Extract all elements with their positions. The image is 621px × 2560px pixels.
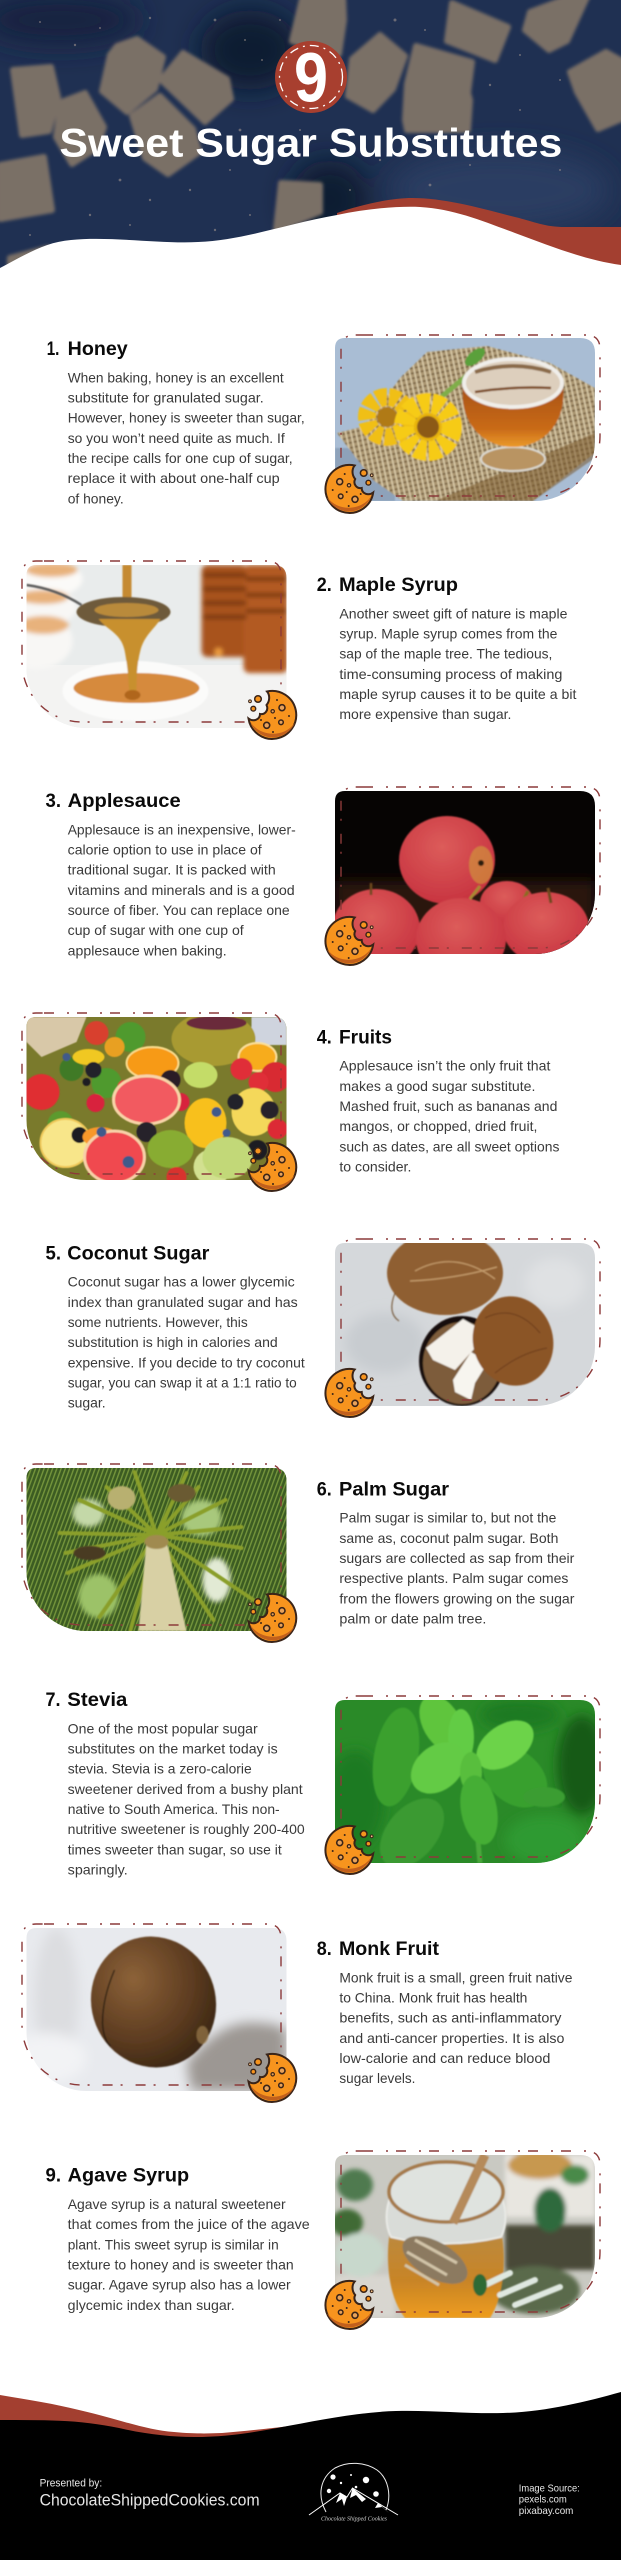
text: honey: of honey.: [68, 490, 124, 506]
panel: 9 agave syrup: [46, 2151, 600, 2329]
icon: cookie: [325, 2281, 373, 2329]
text: honey: so you won’t need quite as much. If: [68, 430, 285, 446]
text: fruits: to consider.: [339, 1158, 411, 1174]
text: coconut sugar: expensive. If you decide to try coconut: [68, 1354, 305, 1370]
text: coconut sugar: [68, 1274, 305, 1411]
text: agave syrup: sugar. Agave syrup also has a lower: [68, 2277, 291, 2293]
footer: image sources: pexels.com: [519, 2494, 567, 2506]
text: applesauce: calorie option to use in place of: [68, 842, 262, 858]
heading: stevia: Stevia: [67, 1689, 127, 1711]
text: agave syrup: glycemic index than sugar.: [68, 2297, 235, 2313]
text: honey: replace it with about one-half cup: [68, 470, 280, 486]
panel: 3 applesauce: [46, 787, 600, 980]
text: stevia: One of the most popular sugar: [68, 1720, 258, 1736]
text: monk fruit: sugar levels.: [339, 2070, 415, 2086]
dashed border: [341, 787, 600, 948]
panel: 6 palm sugar: [22, 1464, 575, 1642]
text: palm sugar: respective plants. Palm sugar comes: [339, 1570, 568, 1586]
heading: monk fruit: Monk Fruit: [339, 1938, 440, 1960]
text: maple syrup: maple syrup causes it to be quite a bit: [339, 686, 576, 702]
text: monk fruit: [339, 1969, 573, 2086]
heading: applesauce: Applesauce: [68, 790, 181, 812]
icon: cookie: [248, 1594, 296, 1642]
panel: 7 stevia: [46, 1688, 607, 1880]
text: palm sugar: same as, coconut palm sugar. Both: [339, 1530, 558, 1546]
dashed border: [341, 2151, 600, 2312]
heading: palm sugar: 6.: [317, 1478, 332, 1500]
heading: maple syrup: 2.: [317, 574, 332, 596]
text: stevia: sweetener derived from a bushy plant: [68, 1781, 303, 1797]
text: maple syrup: Another sweet gift of nature is maple: [339, 605, 568, 621]
text: honey: [68, 369, 305, 506]
text: palm sugar: Palm sugar is similar to, but not the: [339, 1510, 557, 1526]
text: applesauce: traditional sugar. It is packed with: [68, 862, 276, 878]
photo: maple syrup spoon: [26, 565, 286, 728]
header: sugar cubes photo banner: [0, 0, 621, 275]
photo: honey cup and flowers: [335, 338, 595, 501]
text: monk fruit: low-calorie and can reduce blood: [339, 2050, 550, 2066]
text: agave syrup: Agave syrup is a natural sweetener: [68, 2196, 286, 2212]
title: Sweet Sugar Substitutes: [59, 122, 562, 166]
photo: honey jar with dipper: [331, 2151, 595, 2318]
heading: maple syrup: Maple Syrup: [339, 574, 458, 596]
text: palm sugar: palm or date palm tree.: [339, 1610, 486, 1626]
text: stevia: nutritive sweetener is roughly 200-400: [68, 1821, 305, 1837]
dashed border: [22, 561, 281, 722]
text: agave syrup: that comes from the juice of the agave: [68, 2216, 310, 2232]
header wave: white divider: [0, 207, 621, 290]
footer: logo: Chocolate Shipped Cookies: [321, 2517, 388, 2523]
text: maple syrup: more expensive than sugar.: [339, 706, 511, 722]
icon: cookie: [248, 2054, 296, 2102]
text: maple syrup: syrup. Maple syrup comes from the: [339, 626, 558, 642]
text: fruits: mangos, or chopped, dried fruit,: [339, 1118, 537, 1134]
text: maple syrup: sap of the maple tree. The tedious,: [339, 646, 552, 662]
text: honey: substitute for granulated sugar.: [68, 390, 264, 406]
badge: number 9: 9: [294, 39, 328, 117]
text: fruits: such as dates, are all sweet options: [339, 1138, 559, 1154]
text: coconut sugar: sugar, you can swap it at a 1:1 ratio to: [68, 1374, 297, 1390]
text: coconut sugar: sugar.: [68, 1395, 106, 1411]
footer: image sources: Image Source:: [519, 2482, 580, 2494]
footer: image sources: [519, 2482, 580, 2517]
text: maple syrup: [339, 605, 576, 722]
dashed border: [341, 1696, 600, 1857]
dashed border: [22, 1464, 281, 1625]
text: monk fruit: benefits, such as anti-inflammatory: [339, 2010, 561, 2026]
heading: stevia: 7.: [46, 1689, 60, 1711]
panel: 1 honey: [47, 335, 600, 513]
text: monk fruit: Monk fruit is a small, green fruit native: [339, 1969, 573, 1985]
text: monk fruit: and anti-cancer properties. It is also: [339, 2030, 565, 2046]
heading: agave syrup: Agave Syrup: [68, 2165, 189, 2187]
photo: stevia leaves: [335, 1700, 595, 1863]
heading: coconut sugar: Coconut Sugar: [67, 1242, 210, 1264]
dashed border: [22, 1924, 281, 2085]
photo: assorted fruits: [24, 1012, 290, 1187]
footer: presented by: Presented by:: [40, 2478, 102, 2490]
heading: fruits: [317, 1026, 392, 1048]
icon: cookie: [325, 1369, 373, 1417]
photo: palm tree from below: [26, 1468, 286, 1631]
text: maple syrup: time-consuming process of making: [339, 666, 562, 682]
text: honey: the recipe calls for one cup of sugar,: [68, 450, 293, 466]
panel: 2 maple syrup: [0, 561, 576, 739]
heading: coconut sugar: 5.: [46, 1242, 61, 1264]
text: applesauce: vitamins and minerals and is a good: [68, 882, 295, 898]
text: fruits: Applesauce isn’t the only fruit that: [339, 1058, 551, 1074]
icon: cookie: [325, 917, 373, 965]
text: fruits: Mashed fruit, such as bananas and: [339, 1098, 557, 1114]
text: applesauce: applesauce when baking.: [68, 942, 227, 958]
dashed border: [22, 1013, 281, 1174]
text: applesauce: Applesauce is an inexpensive, lower-: [68, 821, 296, 837]
text: applesauce: cup of sugar with one cup of: [68, 922, 244, 938]
heading: palm sugar: Palm Sugar: [339, 1478, 449, 1500]
text: fruits: [339, 1058, 559, 1174]
panel: 4 fruits: [22, 1012, 559, 1191]
dashed border: [341, 335, 600, 496]
footer: presented by: ChocolateShippedCookies.com: [40, 2491, 260, 2510]
text: coconut sugar: substitution is high in calories and: [68, 1334, 278, 1350]
footer: black band: [0, 2392, 621, 2560]
text: palm sugar: [339, 1510, 575, 1626]
text: coconut sugar: some nutrients. However, this: [68, 1314, 248, 1330]
text: applesauce: [68, 821, 296, 958]
badge: number 9: [275, 39, 347, 117]
text: applesauce: source of fiber. You can replace one: [68, 902, 290, 918]
text: fruits: makes a good sugar substitute.: [339, 1078, 535, 1094]
footer wave: red accent: [0, 2395, 290, 2445]
icon: cookie: [325, 1826, 373, 1874]
footer: logo: [309, 2463, 398, 2523]
heading: fruits: Fruits: [339, 1026, 392, 1048]
panel: 8 monk fruit: [6, 1918, 573, 2102]
icon: cookie: [248, 691, 296, 739]
text: agave syrup: texture to honey and is sweeter than: [68, 2256, 294, 2272]
text: honey: However, honey is sweeter than sugar,: [68, 410, 305, 426]
text: stevia: native to South America. This non-: [68, 1801, 280, 1817]
icon: cookie: [325, 465, 373, 513]
panel: 5 coconut sugar: [46, 1231, 600, 1417]
footer: image sources: pixabay.com: [519, 2505, 574, 2517]
text: stevia: sparingly.: [68, 1862, 128, 1878]
text: stevia: [68, 1720, 305, 1878]
footer: presented by: [40, 2478, 260, 2510]
text: agave syrup: plant. This sweet syrup is similar in: [68, 2236, 279, 2252]
text: coconut sugar: index than granulated sugar and has: [68, 1294, 298, 1310]
photo: coconuts: [335, 1231, 595, 1406]
text: stevia: times sweeter than sugar, so use it: [68, 1841, 282, 1857]
text: coconut sugar: Coconut sugar has a lower glycemic: [68, 1274, 295, 1290]
dashed border: [341, 1239, 600, 1400]
icon: cookie: [248, 1143, 296, 1191]
heading: applesauce: 3.: [46, 790, 61, 812]
text: monk fruit: to China. Monk fruit has health: [339, 1990, 527, 2006]
heading: monk fruit: 8.: [317, 1938, 332, 1960]
text: honey: When baking, honey is an excellent: [68, 369, 284, 385]
text: palm sugar: sugars are collected as sap from their: [339, 1550, 575, 1566]
text: agave syrup: [68, 2196, 310, 2313]
heading: fruits: 4.: [317, 1026, 332, 1048]
text: palm sugar: from the flowers growing on the sugar: [339, 1590, 575, 1606]
text: stevia: substitutes on the market today is: [68, 1740, 278, 1756]
heading: honey: 1.: [47, 338, 59, 360]
header wave: red accent: [337, 198, 621, 270]
photo: red apples: [335, 791, 595, 954]
heading: honey: Honey: [68, 338, 128, 360]
heading: agave syrup: 9.: [46, 2165, 61, 2187]
text: stevia: stevia. Stevia is a zero-calorie: [68, 1761, 252, 1777]
photo: monk fruit: [26, 1928, 286, 2091]
